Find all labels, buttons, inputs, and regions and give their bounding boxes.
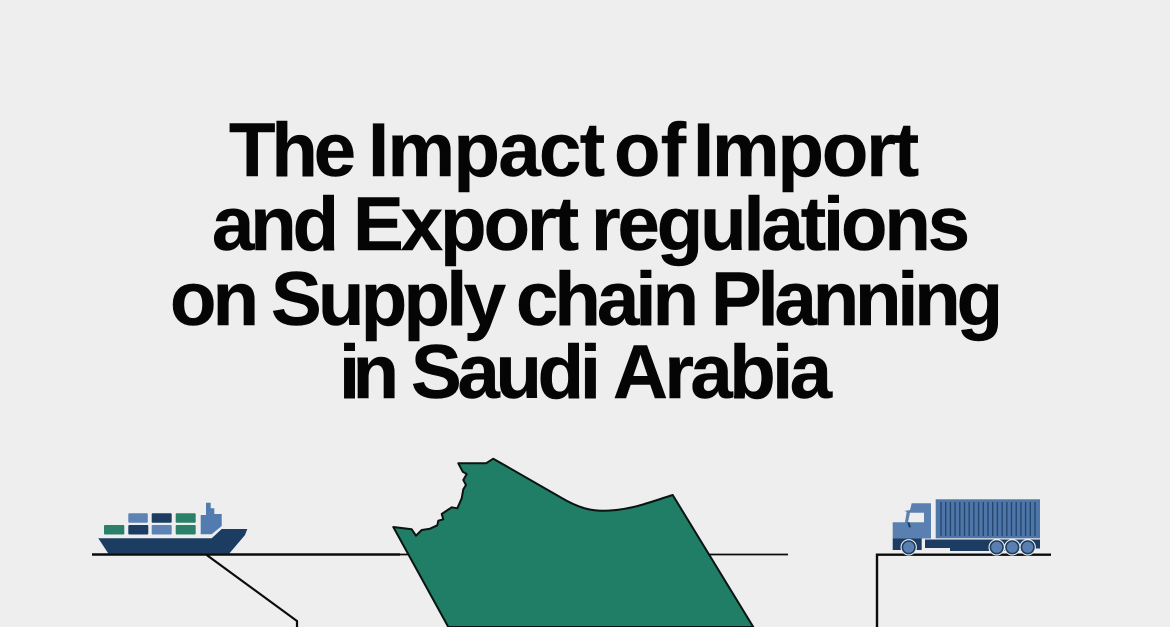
ship hull bbox=[98, 529, 247, 554]
connector line: truck route bbox=[877, 555, 1051, 627]
truck cab window bbox=[908, 513, 924, 522]
truck mirror bbox=[908, 522, 910, 527]
title: Export bbox=[353, 182, 579, 267]
title: in bbox=[339, 330, 399, 415]
connector line: ship route bbox=[92, 554, 788, 627]
title: chain bbox=[516, 257, 699, 342]
title: Saudi bbox=[411, 330, 601, 415]
truck wheels bbox=[900, 539, 1036, 556]
icon: cargo ship bbox=[98, 503, 247, 554]
icon: container truck bbox=[893, 499, 1040, 556]
title: of bbox=[614, 108, 687, 193]
truck chassis bbox=[925, 540, 1040, 551]
title: Import bbox=[693, 108, 919, 193]
title bbox=[170, 108, 1003, 415]
title: regulations bbox=[591, 182, 970, 267]
ship funnel bbox=[201, 503, 222, 534]
title: Planning bbox=[711, 257, 1003, 342]
title: Impact bbox=[368, 108, 605, 193]
truck container bbox=[936, 499, 1040, 538]
title: on bbox=[170, 257, 259, 342]
map: Saudi Arabia bbox=[393, 459, 753, 627]
truck cab bbox=[893, 503, 931, 538]
title: Arabia bbox=[613, 330, 833, 415]
title: The bbox=[229, 108, 356, 193]
ship containers bbox=[104, 513, 196, 534]
title: and bbox=[212, 182, 339, 267]
title: Supply bbox=[271, 257, 506, 342]
